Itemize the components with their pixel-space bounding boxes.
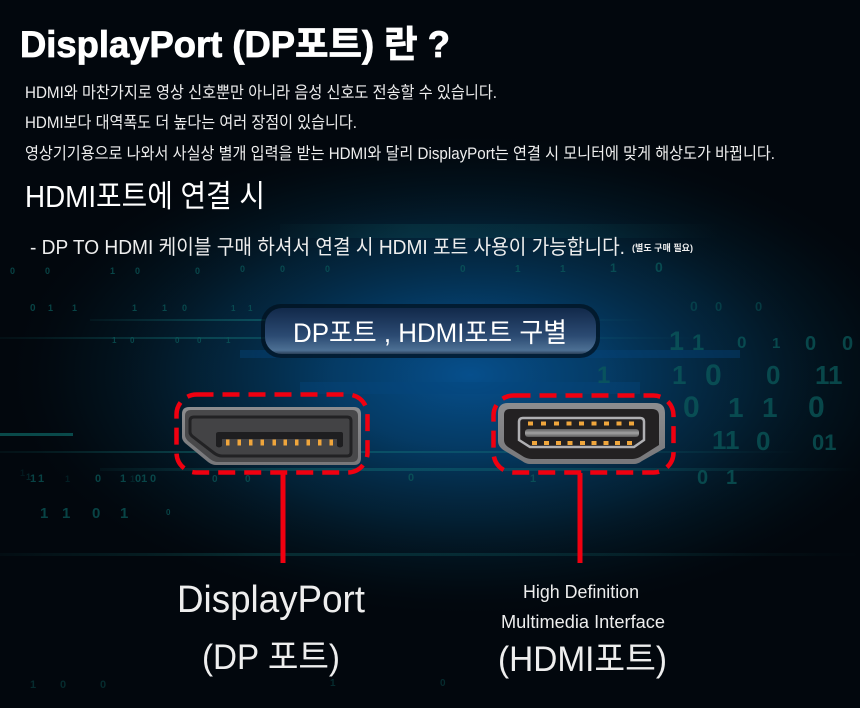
infographic canvas: 1 bbox=[530, 473, 536, 485]
infographic canvas: 1 bbox=[30, 473, 36, 485]
callout: DisplayPort highlight bbox=[176, 394, 368, 472]
infographic canvas: 0 bbox=[690, 298, 698, 314]
infographic canvas: 1 bbox=[248, 304, 253, 313]
infographic canvas: 0 bbox=[805, 333, 816, 355]
infographic canvas: 0 bbox=[715, 299, 722, 314]
infographic canvas: 1 bbox=[772, 335, 780, 352]
label: DisplayPort: (DP 포트) bbox=[202, 638, 340, 677]
infographic canvas: 0 bbox=[45, 266, 50, 276]
infographic canvas: 1 bbox=[110, 266, 115, 276]
infographic canvas: 1 bbox=[120, 473, 126, 485]
subheading: HDMI port connection: HDMI포트에 연결 시 bbox=[25, 179, 265, 214]
label: DisplayPort: DisplayPort bbox=[177, 579, 365, 621]
infographic canvas: 0 bbox=[95, 473, 101, 485]
infographic canvas: 0 bbox=[60, 679, 66, 691]
infographic canvas: 0 bbox=[245, 474, 251, 485]
label: HDMI: High Definition bbox=[523, 582, 639, 602]
infographic canvas: 1 bbox=[515, 264, 521, 275]
infographic canvas: 1 bbox=[162, 303, 167, 313]
infographic canvas: 0 bbox=[182, 303, 187, 313]
infographic canvas: 1 bbox=[728, 392, 744, 423]
infographic canvas: 1 bbox=[120, 505, 128, 522]
infographic canvas: 0 bbox=[135, 266, 140, 276]
infographic canvas: 1 bbox=[610, 261, 617, 275]
infographic canvas: 1 bbox=[38, 473, 44, 485]
callout: HDMI highlight bbox=[494, 396, 674, 472]
infographic canvas: 0 bbox=[195, 266, 200, 276]
infographic canvas: 1 bbox=[30, 679, 36, 691]
infographic canvas: 0 bbox=[737, 333, 746, 352]
infographic canvas: 0 bbox=[166, 508, 171, 517]
infographic canvas: 0 bbox=[30, 303, 36, 314]
infographic canvas: 1 bbox=[669, 326, 684, 356]
icon: HDMI connector bbox=[498, 403, 665, 464]
infographic canvas: 1 bbox=[597, 362, 610, 389]
infographic canvas: 0 bbox=[130, 336, 135, 345]
infographic canvas: 1 bbox=[226, 336, 231, 345]
infographic canvas: 1 bbox=[40, 505, 48, 522]
description text block bbox=[25, 83, 775, 163]
infographic canvas: 1 bbox=[692, 330, 704, 355]
title: DisplayPort (DP포트) 란 ? bbox=[20, 24, 450, 65]
infographic canvas: 0 bbox=[756, 426, 770, 456]
infographic canvas: 1 bbox=[132, 303, 137, 313]
label: HDMI: Multimedia Interface bbox=[501, 612, 665, 632]
infographic canvas: 01 bbox=[812, 430, 836, 455]
section pill label: DP포트 , HDMI포트 구별 bbox=[293, 318, 567, 348]
infographic canvas: 1 bbox=[330, 678, 336, 689]
infographic canvas: 0 bbox=[408, 472, 414, 484]
description line 1: HDMI와 마찬가지로 영상 신호뿐만 아니라 음성 신호도 전송할 수 있습니다. bbox=[25, 83, 497, 102]
infographic canvas: 1 bbox=[130, 474, 135, 484]
infographic canvas: 1 bbox=[672, 360, 686, 390]
infographic canvas: 01 bbox=[135, 473, 147, 485]
infographic canvas: 11 bbox=[815, 360, 842, 390]
note: sold separately: (별도 구매 필요) bbox=[632, 242, 693, 253]
description line 2: HDMI보다 대역폭도 더 높다는 여러 장점이 있습니다. bbox=[25, 113, 357, 132]
infographic canvas: 0 bbox=[175, 336, 180, 345]
infographic canvas: 11 bbox=[712, 425, 740, 455]
infographic canvas: 0 bbox=[460, 264, 466, 275]
icon: DisplayPort connector bbox=[182, 407, 361, 465]
infographic canvas: 1 bbox=[48, 303, 53, 313]
infographic canvas: 0 bbox=[150, 473, 156, 485]
infographic canvas: 1 bbox=[726, 467, 737, 489]
infographic canvas: 1 bbox=[72, 303, 77, 313]
infographic canvas: 0 bbox=[683, 391, 700, 424]
description line 3: 영상기기용으로 나와서 사실상 별개 입력을 받는 HDMI와 달리 DisplayPort는 연결 시 모니터에 맞게 해상도가 바뀝니다. bbox=[25, 144, 775, 163]
infographic canvas: 0 bbox=[197, 336, 202, 345]
infographic canvas: 0 bbox=[697, 467, 708, 489]
infographic canvas: 1 bbox=[65, 474, 70, 484]
section pill label bbox=[261, 304, 600, 358]
infographic canvas: 0 bbox=[212, 474, 218, 485]
leader line: DisplayPort bbox=[280, 473, 286, 563]
leader line: HDMI bbox=[578, 473, 582, 563]
label: HDMI bbox=[498, 582, 667, 679]
infographic canvas: 0 bbox=[280, 264, 285, 274]
infographic canvas: 0 bbox=[842, 333, 853, 355]
infographic canvas: 1 bbox=[62, 505, 70, 522]
infographic canvas: 1 bbox=[231, 304, 236, 313]
infographic canvas: 0 bbox=[655, 259, 663, 275]
label: HDMI: (HDMI포트) bbox=[498, 640, 667, 679]
infographic canvas: 0 bbox=[10, 266, 15, 276]
infographic canvas: 0 bbox=[705, 359, 722, 392]
infographic canvas: 1 bbox=[560, 264, 566, 275]
infographic canvas: 1 bbox=[112, 336, 117, 345]
infographic canvas: 0 bbox=[808, 391, 825, 424]
note: DP to HDMI cable: - DP TO HDMI 케이블 구매 하셔서 연결 시 HDMI 포트 사용이 가능합니다. bbox=[30, 236, 625, 259]
infographic canvas: 0 bbox=[240, 264, 245, 274]
infographic canvas: 0 bbox=[325, 264, 330, 274]
infographic canvas: 1 bbox=[26, 472, 31, 482]
infographic canvas: 1 bbox=[20, 468, 25, 478]
infographic canvas: 0 bbox=[766, 360, 780, 390]
infographic canvas: 0 bbox=[440, 678, 446, 689]
label: DisplayPort bbox=[177, 579, 365, 677]
infographic canvas: 0 bbox=[92, 505, 100, 522]
infographic canvas: 0 bbox=[755, 299, 762, 314]
infographic canvas: 0 bbox=[100, 679, 106, 691]
infographic canvas: 1 bbox=[762, 392, 778, 423]
